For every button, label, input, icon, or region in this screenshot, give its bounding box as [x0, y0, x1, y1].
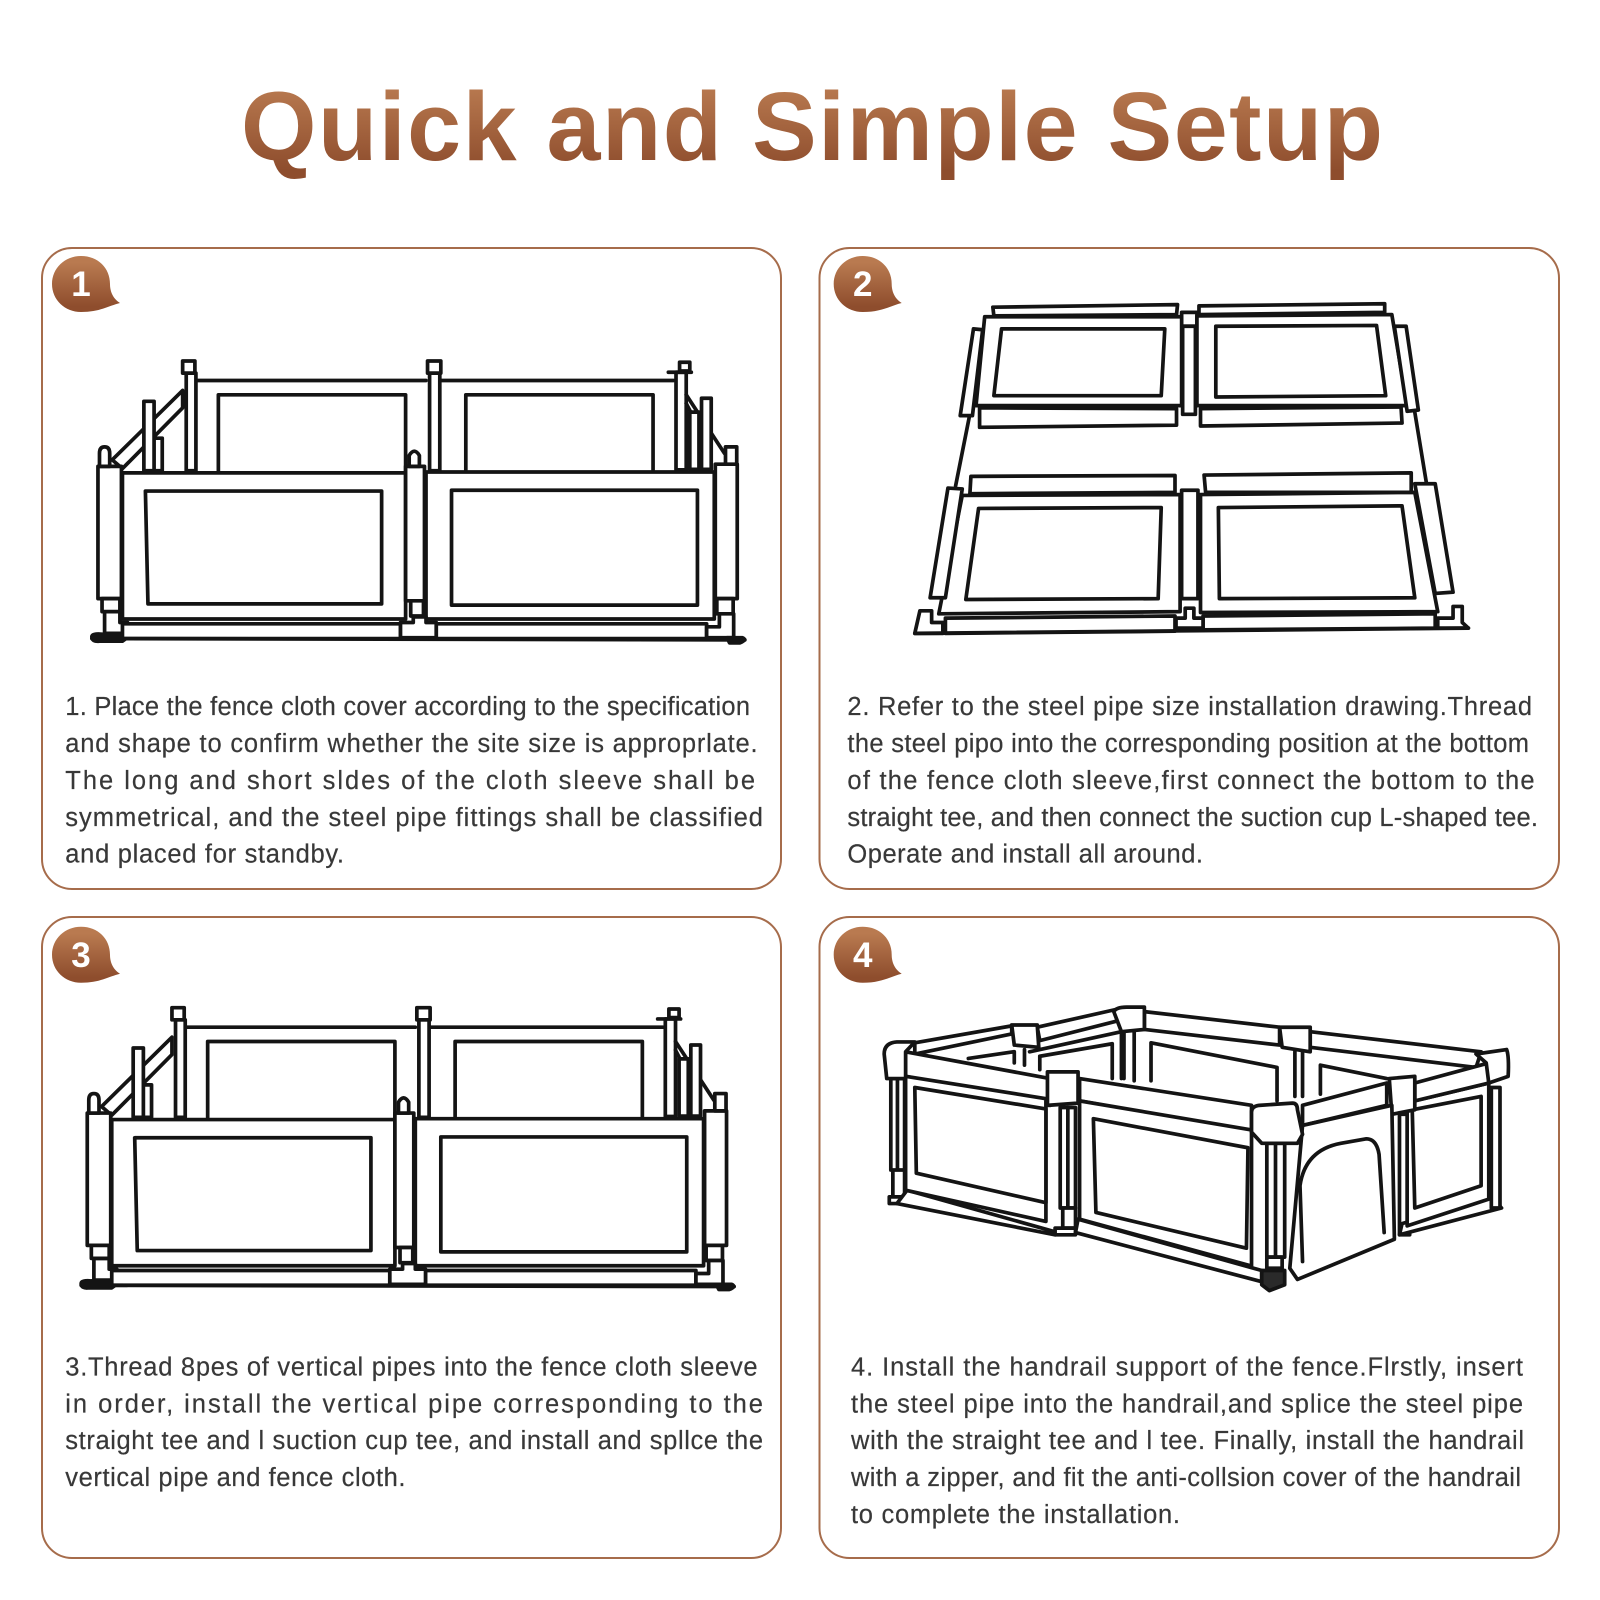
illustration: completed playpen in perspective: [884, 1007, 1508, 1291]
illustration: vertical pipes installed in the fence: [81, 1008, 734, 1290]
text: step 1 instructions: and shape to confirm whether the site size is approprlate.: [65, 730, 758, 758]
badge 2: [834, 256, 902, 312]
badge 4: [834, 927, 902, 983]
text: step 2 instructions: Operate and install all around.: [847, 840, 1203, 868]
text: step 2 instructions: 2. Refer to the steel pipe size installation drawing.Thread: [847, 693, 1532, 721]
illustration: steel pipes threaded into the cloth sleeves: [915, 304, 1468, 633]
text: step 3 instructions: straight tee and l suction cup tee, and install and spllce the: [65, 1427, 763, 1455]
panel: step 4: [820, 917, 1559, 1558]
text: step 1 instructions: [65, 693, 763, 868]
title: Quick and Simple Setup: [241, 72, 1383, 181]
text: step 2 instructions: the steel pipo into the corresponding position at the bottom: [847, 730, 1529, 758]
text: step 1 instructions: The long and short sldes of the cloth sleeve shall be: [65, 767, 755, 795]
text: step 4 instructions: 4. Install the handrail support of the fence.Flrstly, insert: [851, 1354, 1523, 1382]
badge 2: 2: [853, 265, 872, 304]
text: step 3 instructions: [65, 1354, 763, 1492]
badge 4: 4: [853, 936, 873, 975]
text: step 1 instructions: and placed for standby.: [65, 840, 344, 868]
badge 3: 3: [71, 936, 91, 975]
text: step 4 instructions: [850, 1354, 1524, 1529]
text: step 2 instructions: of the fence cloth sleeve,first connect the bottom to the: [847, 767, 1535, 795]
text: step 3 instructions: 3.Thread 8pes of vertical pipes into the fence cloth sleeve: [65, 1354, 758, 1382]
text: step 4 instructions: the steel pipe into the handrail,and splice the steel pipe: [851, 1390, 1523, 1418]
text: step 2 instructions: [847, 693, 1538, 868]
text: step 3 instructions: in order, install the vertical pipe corresponding to the: [65, 1390, 763, 1418]
illustration: fence with cloth cover laid out: [92, 361, 745, 643]
panel: step 2: [820, 248, 1559, 889]
text: step 1 instructions: symmetrical, and the steel pipe fittings shall be classified: [65, 804, 763, 832]
panel: step 3: [42, 917, 781, 1558]
text: step 4 instructions: to complete the installation.: [851, 1501, 1180, 1529]
panel: step 1: [42, 248, 781, 889]
badge 3: [52, 927, 120, 983]
text: step 4 instructions: with a zipper, and fit the anti-collsion cover of the handrail: [850, 1464, 1521, 1492]
text: step 4 instructions: with the straight tee and l tee. Finally, install the handrail: [850, 1427, 1524, 1455]
text: step 3 instructions: vertical pipe and fence cloth.: [65, 1464, 406, 1492]
text: step 2 instructions: straight tee, and then connect the suction cup L-shaped tee.: [847, 804, 1538, 832]
badge 1: [52, 256, 120, 312]
badge 1: 1: [71, 265, 91, 304]
text: step 1 instructions: 1. Place the fence cloth cover according to the specification: [65, 693, 750, 721]
